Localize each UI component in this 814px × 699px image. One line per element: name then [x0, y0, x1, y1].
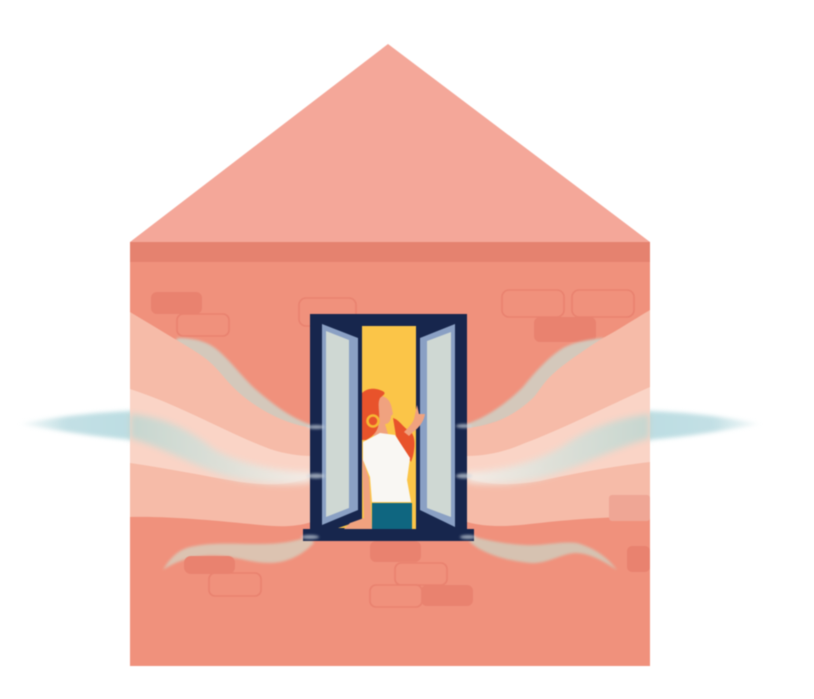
- trousers: [372, 503, 412, 530]
- cool air core: right: [467, 414, 650, 484]
- air wisps: grey upper and lower: [163, 338, 617, 570]
- earring: [368, 416, 378, 426]
- air wisp: outside right: [646, 411, 760, 440]
- woman: [338, 389, 425, 530]
- brick over lower left wisp: [184, 556, 235, 574]
- sill: [303, 529, 474, 541]
- house wall: [130, 242, 650, 666]
- left shutter: [322, 324, 358, 525]
- window: [303, 314, 474, 541]
- roof: [130, 44, 650, 242]
- opening: yellow interior: [362, 326, 416, 530]
- lowered arm: [344, 458, 372, 529]
- air wisp: outside left: [20, 411, 134, 440]
- air flow band: left outer: [130, 312, 312, 526]
- cool air core: left: [130, 414, 312, 484]
- air flow band: right inner: [467, 387, 650, 484]
- air flow band: left inner: [130, 389, 312, 484]
- air flow band: right outer: [467, 310, 650, 526]
- right shutter: [420, 324, 455, 527]
- hair front: [362, 389, 385, 440]
- yellow floor left: [338, 520, 372, 528]
- window frame: [310, 314, 467, 532]
- shirt: [363, 433, 411, 502]
- brick under air flow: [609, 495, 650, 521]
- eave band: [130, 242, 650, 262]
- light glints on frame: [301, 424, 476, 539]
- head: [368, 396, 393, 436]
- hair back: [393, 418, 415, 462]
- raised hand: [404, 405, 425, 436]
- bricks: [151, 290, 650, 607]
